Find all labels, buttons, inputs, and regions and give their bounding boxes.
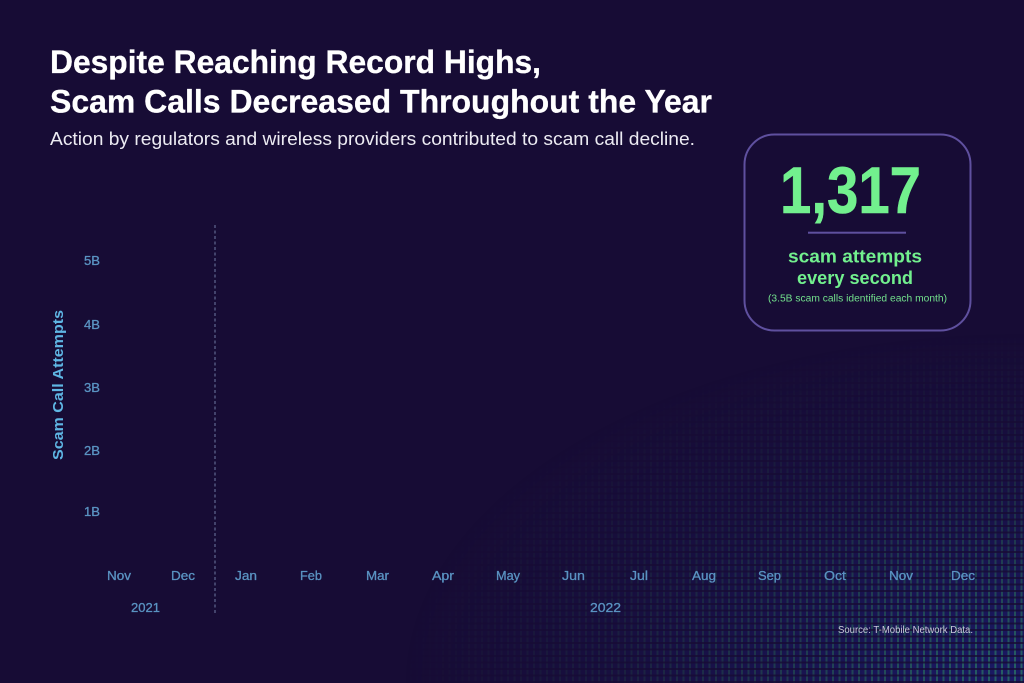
x-axis month labels: Sep [758, 568, 781, 583]
background dot-grid glow [507, 390, 1024, 683]
x-axis month labels: Mar [366, 568, 390, 583]
x-axis year labels: 2021 [131, 600, 160, 615]
y-axis labels [84, 253, 100, 519]
title [50, 44, 712, 120]
x-axis month labels: Dec [951, 568, 976, 583]
callout rule [808, 232, 906, 234]
x-axis month labels: Jan [235, 568, 257, 583]
x-axis month labels: Jun [562, 568, 585, 583]
x-axis month labels: Nov [107, 568, 132, 583]
x-axis year labels: 2022 [590, 600, 621, 615]
x-axis month labels: Oct [824, 568, 846, 583]
x-axis month labels: Aug [692, 568, 716, 583]
x-axis month labels: Dec [171, 568, 196, 583]
y-axis labels: 5B [84, 253, 100, 268]
year divider [214, 225, 216, 613]
y-axis labels: 2B [84, 443, 100, 458]
x-axis month labels: Feb [300, 568, 322, 583]
title: Scam Calls Decreased Throughout the Year [50, 84, 712, 120]
subtitle: Action by regulators and wireless providers contributed to scam call decline. [50, 128, 695, 149]
x-axis month labels: Jul [630, 568, 648, 583]
y-axis title: Scam Call Attempts [50, 310, 67, 460]
y-axis labels: 3B [84, 380, 100, 395]
callout note: (3.5B scam calls identified each month) [768, 294, 947, 304]
x-axis month labels: Nov [889, 568, 914, 583]
x-axis month labels: May [496, 568, 520, 583]
x-axis year labels [131, 600, 621, 615]
callout label: every second [797, 267, 913, 288]
callout border [744, 134, 970, 330]
source note: Source: T-Mobile Network Data. [838, 625, 973, 636]
callout label: scam attempts [788, 246, 922, 266]
callout: scam attempts per second [744, 134, 970, 330]
y-axis labels: 1B [84, 504, 100, 519]
big number: 1,317 [780, 153, 921, 227]
x-axis month labels: Apr [432, 568, 455, 583]
title: Despite Reaching Record Highs, [50, 44, 541, 80]
y-axis labels: 4B [84, 317, 100, 332]
x-axis month labels [107, 568, 976, 583]
callout label [788, 246, 922, 288]
